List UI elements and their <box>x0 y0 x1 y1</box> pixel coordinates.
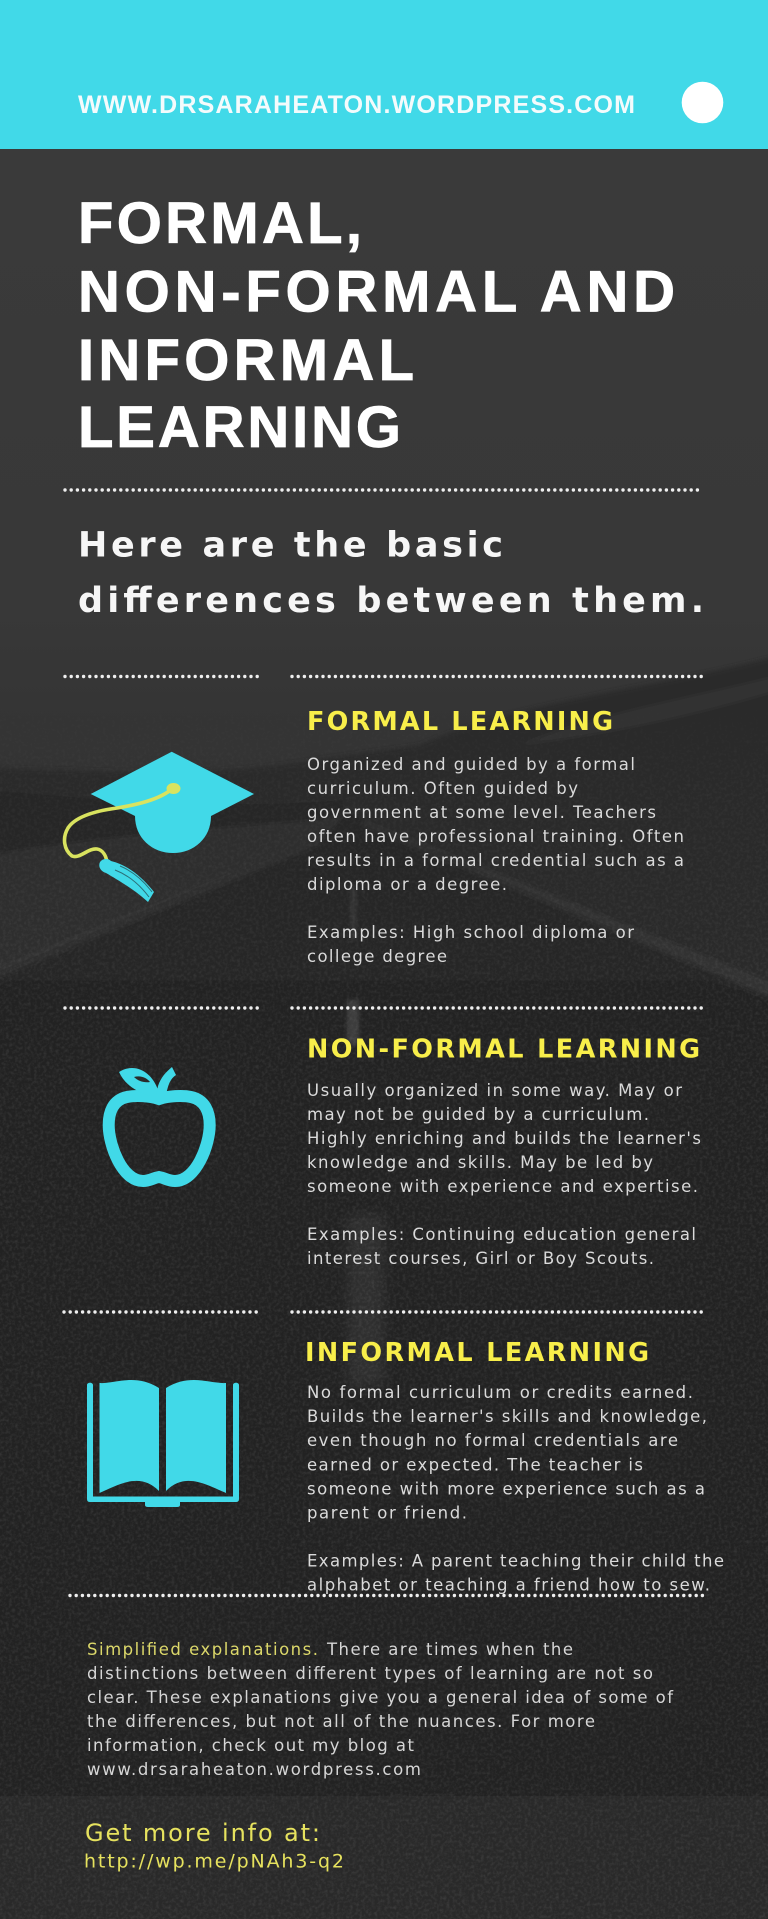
description: even though no formal credentials are <box>307 1431 678 1450</box>
text block: simplified explanations note: information, check out my blog at <box>87 1736 415 1755</box>
description: Organized and guided by a formal <box>307 755 635 774</box>
title <box>78 191 675 460</box>
description: curriculum. Often guided by <box>307 779 578 798</box>
text block: simplified explanations note <box>87 1640 674 1779</box>
heading: NON-FORMAL LEARNING <box>307 1034 700 1064</box>
left ground <box>0 817 343 972</box>
title: LEARNING <box>78 395 401 460</box>
description: diploma or a degree. <box>307 875 507 894</box>
panel: formal learning <box>307 707 684 966</box>
description: parent or friend. <box>307 1504 467 1522</box>
description: Examples: A parent teaching their child the <box>307 1552 724 1570</box>
description: government at some level. Teachers <box>307 803 656 822</box>
panel: informal learning <box>305 1338 724 1594</box>
header band <box>0 0 768 149</box>
title: INFORMAL <box>78 328 414 393</box>
description: college degree <box>307 947 447 966</box>
heading: FORMAL LEARNING <box>307 707 613 737</box>
description: interest courses, Girl or Boy Scouts. <box>307 1249 654 1268</box>
road surface <box>0 812 768 1919</box>
description <box>307 1081 701 1268</box>
footer: more info link: http://wp.me/pNAh3-q2 <box>84 1850 344 1872</box>
title: FORMAL, <box>78 191 362 256</box>
text block: simplified explanations note: Simplified explanations. <box>87 1640 318 1659</box>
icon: graduation cap <box>65 752 254 902</box>
description: Usually organized in some way. May or <box>307 1081 682 1100</box>
description: Examples: High school diploma or <box>307 923 634 942</box>
description <box>307 1383 724 1594</box>
description: Builds the learner's skills and knowledge, <box>307 1407 707 1426</box>
header url: WWW.DRSARAHEATON.WORDPRESS.COM <box>78 91 635 119</box>
icon: white circle <box>682 82 723 123</box>
description: someone with experience and expertise. <box>307 1177 698 1196</box>
description: results in a formal credential such as a <box>307 851 684 870</box>
heading: INFORMAL LEARNING <box>305 1338 649 1368</box>
description: may not be guided by a curriculum. <box>307 1105 649 1124</box>
text block: simplified explanations note: the differences, but not all of the nuances. For more <box>87 1712 595 1731</box>
left road edge <box>0 812 346 982</box>
footer: more info link <box>84 1819 344 1872</box>
title: NON-FORMAL AND <box>78 260 675 324</box>
description: earned or expected. The teacher is <box>307 1456 643 1474</box>
text block: simplified explanations note: There are times when the <box>326 1640 573 1659</box>
description: someone with more experience such as a <box>307 1480 705 1498</box>
text block: simplified explanations note: www.drsaraheaton.wordpress.com <box>87 1760 421 1779</box>
text block: simplified explanations note: clear. These explanations give you a general idea of some of <box>87 1688 674 1707</box>
right road edge <box>360 820 768 1003</box>
subtitle: Here are the basic <box>78 526 503 566</box>
subtitle <box>78 526 704 621</box>
far hills <box>0 655 768 1010</box>
description: Highly enriching and builds the learner's <box>307 1129 701 1148</box>
icon: open book <box>87 1380 239 1507</box>
description: often have professional training. Often <box>307 827 684 846</box>
footer: more info link: Get more info at: <box>85 1819 320 1847</box>
icon: apple <box>109 1067 210 1181</box>
panel: non-formal learning <box>307 1034 701 1268</box>
text block: simplified explanations note: distinctions between different types of learning are not so <box>87 1664 653 1683</box>
description: knowledge and skills. May be led by <box>307 1153 653 1172</box>
description: No formal curriculum or credits earned. <box>307 1383 693 1402</box>
description: alphabet or teaching a friend how to sew. <box>307 1576 710 1594</box>
description: Examples: Continuing education general <box>307 1225 696 1244</box>
description <box>307 755 684 966</box>
subtitle: differences between them. <box>78 581 704 621</box>
right ground <box>363 745 768 995</box>
